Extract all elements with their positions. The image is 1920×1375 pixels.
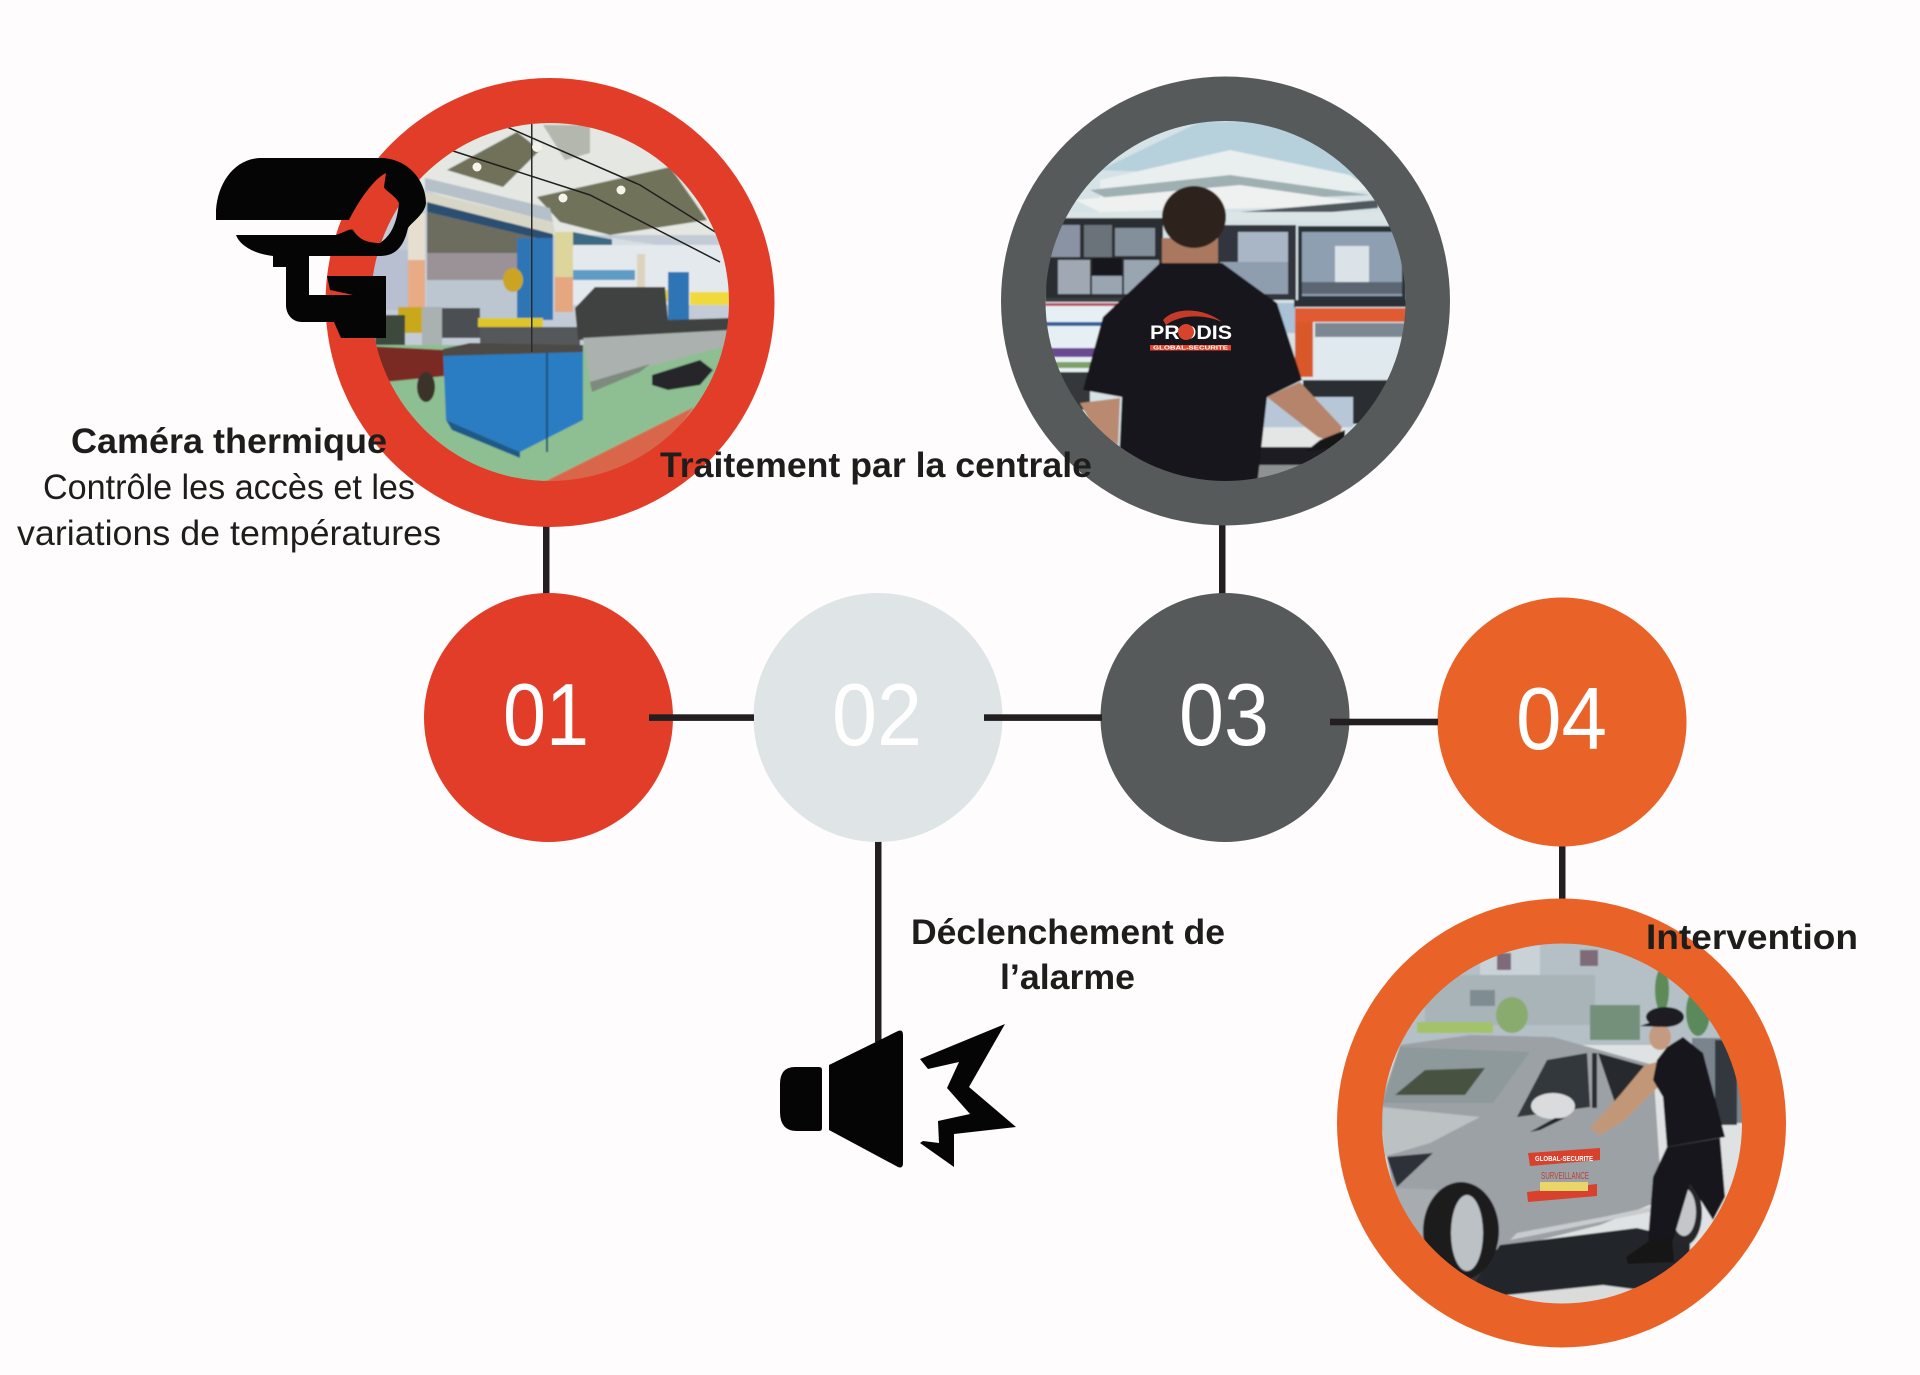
connector: step 1 to photo: [543, 525, 550, 595]
video wall top row: [1045, 218, 1163, 303]
car body: [1378, 1035, 1662, 1250]
operator: [1080, 398, 1120, 445]
step 2 number circle: [754, 593, 1002, 842]
decal on car door: SURVEILLANCE: [1541, 1171, 1589, 1182]
panel: step 1 photo ring, factory: [326, 78, 774, 527]
connector: 01 to 02: [649, 714, 754, 721]
agent: [1590, 1062, 1660, 1135]
step 1 number circle: [424, 593, 673, 842]
photo: factory interior: [365, 115, 735, 495]
connector: 03 to 04: [1330, 719, 1438, 725]
icon: thermal camera: [216, 158, 426, 338]
columns and towers: [408, 213, 425, 260]
panel: step 3 photo ring, control room: [1001, 76, 1450, 526]
road: [1470, 1228, 1690, 1298]
connector: 02 to 03: [984, 714, 1102, 721]
ceiling: [420, 123, 716, 236]
decal on car door: GLOBAL-SECURITE: [1535, 1154, 1593, 1163]
logo on shirt: PRODIS: [1150, 323, 1232, 344]
photo: agent opening patrol car: [1378, 940, 1745, 1310]
blue bin: [443, 346, 583, 452]
step 3 number circle: 03: [1179, 665, 1269, 764]
logo on shirt: [1150, 310, 1232, 352]
text block: step 1 caption: [17, 422, 441, 553]
step 1 number circle: 01: [503, 665, 589, 764]
connector: step 3 to photo: [1219, 523, 1226, 595]
text block: step 1 caption: variations de températures: [17, 514, 441, 553]
photo: operator facing video wall: [1040, 118, 1412, 487]
step 4 number circle: 04: [1516, 669, 1607, 768]
decal on car door: [1527, 1148, 1600, 1202]
step 4 number circle: [1438, 598, 1686, 846]
text block: step 4 caption: Intervention: [1646, 918, 1858, 957]
video wall lower row: [1046, 298, 1123, 302]
logo on shirt: GLOBAL-SECURITE: [1153, 346, 1229, 352]
text block: step 2 caption: Déclenchement de: [911, 913, 1225, 952]
text block: step 1 caption: Caméra thermique: [71, 422, 387, 461]
panel: step 4 photo ring, intervention car: [1337, 898, 1786, 1348]
text block: step 3 caption: Traitement par la centrale: [660, 446, 1092, 485]
floor: [376, 344, 724, 481]
connector: step 2 to alarm icon: [875, 840, 882, 1042]
connector: step 4 to photo: [1559, 845, 1566, 901]
text block: step 1 caption: Contrôle les accès et les: [43, 468, 415, 507]
wheels: [1423, 1182, 1499, 1280]
text block: step 2 caption: [911, 913, 1225, 997]
icon: alarm speaker with burst: [780, 1024, 1016, 1168]
text block: step 2 caption: l’alarme: [1000, 958, 1135, 997]
step 2 number circle: 02: [832, 665, 922, 764]
step 3 number circle: [1100, 593, 1350, 842]
machinery: [398, 307, 422, 333]
walls: [427, 253, 517, 280]
